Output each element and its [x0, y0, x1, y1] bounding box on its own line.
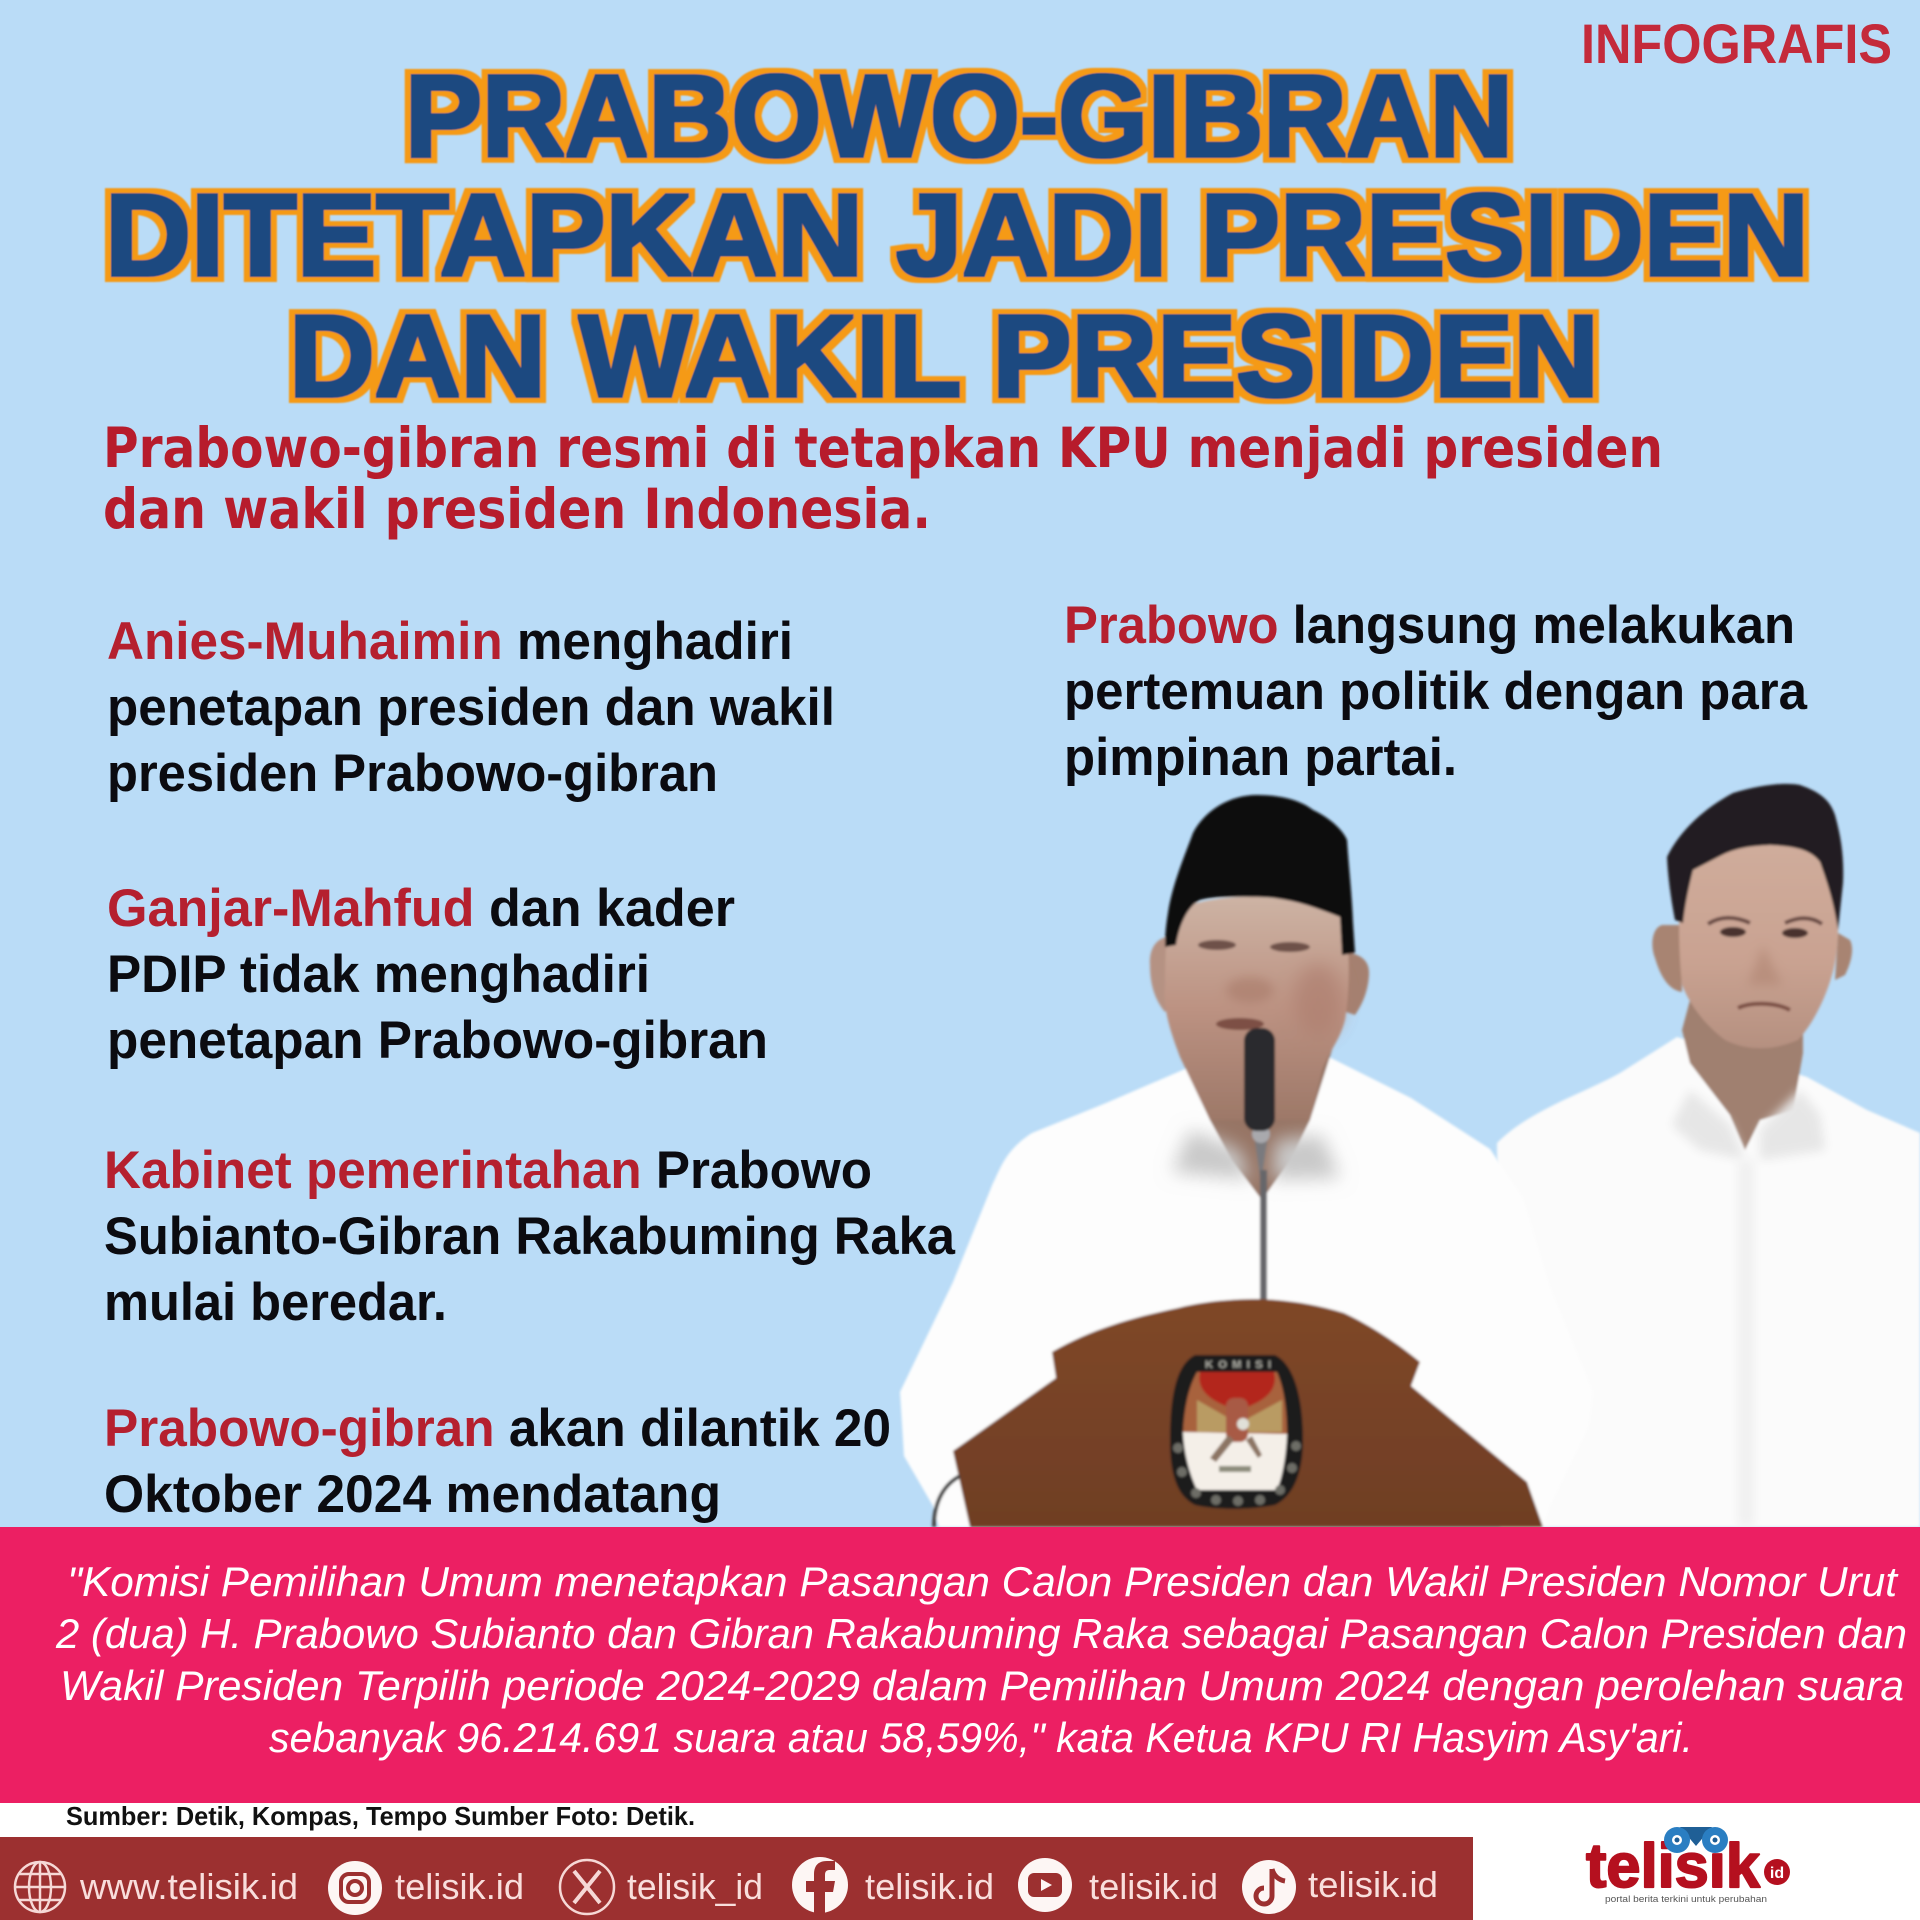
placket: Gibran [1738, 1160, 1754, 1527]
emblem red heart [1199, 1372, 1275, 1410]
text block: Prabowo-gibran dilantik: Oktober 2024 mendatang [104, 1465, 721, 1524]
emblem wings [1197, 1400, 1282, 1432]
icon: youtube [1018, 1858, 1072, 1912]
nose: Gibran [1748, 945, 1782, 985]
quote text: 2 (dua) H. Prabowo Subianto dan Gibran Rakabuming Raka sebagai Pasangan Calon Presiden dan [55, 1610, 1907, 1657]
icon: globe [15, 1862, 65, 1912]
text block: Prabowo-gibran dilantik [104, 1399, 891, 1524]
icon: facebook [792, 1857, 848, 1913]
text block: Prabowo pertemuan politik [1064, 596, 1807, 787]
hair: Gibran [1667, 784, 1843, 930]
logo badge: id [1770, 1865, 1784, 1882]
logo badge [1764, 1859, 1790, 1885]
subtitle: Prabowo-gibran resmi di tetapkan KPU menjadi presiden [103, 416, 1663, 480]
neck: Gibran [1682, 1000, 1803, 1150]
quote text [55, 1558, 1907, 1761]
text block: Ganjar-Mahfud: Ganjar-Mahfud dan kader [107, 879, 735, 938]
text block: Kabinet pemerintahan: Kabinet pemerintahan Prabowo [104, 1141, 872, 1200]
emblem red half [1183, 1372, 1287, 1435]
icon: tiktok [1242, 1860, 1296, 1914]
ears: Prabowo [1150, 937, 1178, 1012]
text block: Prabowo pertemuan politik: pimpinan partai. [1064, 728, 1457, 787]
title [105, 51, 1809, 421]
facebook handle: telisik.id [865, 1866, 994, 1907]
eyes: Prabowo [1198, 940, 1310, 952]
text block: Anies-Muhaimin: penetapan presiden dan wakil [107, 678, 835, 737]
text block: Anies-Muhaimin: Anies-Muhaimin menghadiri [107, 612, 793, 671]
collar: Prabowo [1172, 1130, 1340, 1180]
subtitle [103, 416, 1663, 541]
quote panel [0, 1527, 1920, 1803]
website: www.telisik.id [79, 1866, 298, 1907]
cheek shading: Prabowo [1294, 964, 1342, 1036]
mouth: Prabowo [1216, 1018, 1264, 1030]
logo eyes [1664, 1827, 1728, 1853]
footer background [0, 1837, 1473, 1920]
subtitle: dan wakil presiden Indonesia. [103, 477, 931, 541]
eyes: Gibran [1708, 918, 1822, 938]
background [0, 0, 1920, 1530]
microphone stem [1252, 1125, 1270, 1302]
neck: Prabowo [1180, 1050, 1332, 1200]
icon: instagram [328, 1861, 382, 1915]
mouth: Gibran [1738, 1004, 1790, 1010]
logo tagline: portal berita terkini untuk perubahan [1605, 1894, 1767, 1904]
logo: telisik.id [1586, 1827, 1790, 1904]
quote text: sebanyak 96.214.691 suara atau 58,59%," kata Ketua KPU RI Hasyim Asy'ari. [269, 1714, 1693, 1761]
emblem beads [1173, 1441, 1301, 1506]
text block: Kabinet pemerintahan [104, 1141, 955, 1332]
face: Gibran [1679, 835, 1838, 1048]
photo: Prabowo [900, 795, 1593, 1527]
emblem shield [1170, 1355, 1303, 1509]
text block: Ganjar-Mahfud: penetapan Prabowo-gibran [107, 1011, 768, 1070]
collar: Gibran [1672, 1090, 1825, 1160]
cable [934, 1476, 960, 1527]
title: PRABOWO-GIBRAN [405, 51, 1513, 181]
X handle: telisik_id [627, 1866, 763, 1907]
logo wordmark: telisik [1586, 1832, 1760, 1901]
instagram handle: telisik.id [395, 1866, 524, 1907]
shirt: Prabowo [900, 1058, 1593, 1527]
shirt: Gibran [1497, 1037, 1920, 1527]
text block: Anies-Muhaimin [107, 612, 835, 803]
text block: Anies-Muhaimin: presiden Prabowo-gibran [107, 744, 718, 803]
footer bar [0, 1837, 1473, 1920]
photo: Gibran [1497, 784, 1920, 1527]
emblem white half [1183, 1432, 1287, 1490]
title: DITETAPKAN JADI PRESIDEN [105, 170, 1809, 300]
podium [953, 1299, 1543, 1527]
text block: Ganjar-Mahfud: PDIP tidak menghadiri [107, 945, 650, 1004]
face: Prabowo [1165, 897, 1349, 1120]
quote text: "Komisi Pemilihan Umum menetapkan Pasangan Calon Presiden dan Wakil Presiden Nomor Urut [67, 1558, 1899, 1605]
nose: Prabowo [1226, 977, 1274, 1003]
ears: Gibran [1652, 925, 1682, 992]
emblem: KPU [1170, 1355, 1303, 1509]
text block: Ganjar-Mahfud [107, 879, 768, 1070]
youtube handle: telisik.id [1089, 1866, 1218, 1907]
quote text: Wakil Presiden Terpilih periode 2024-2029 dalam Pemilihan Umum 2024 dengan perolehan suara [60, 1662, 1904, 1709]
quote background [0, 1527, 1920, 1803]
source line: Sumber: Detik, Kompas, Tempo Sumber Foto: Detik. [66, 1801, 695, 1831]
hat: Prabowo [1165, 795, 1355, 955]
emblem garuda [1210, 1398, 1262, 1472]
text block: Prabowo pertemuan politik: Prabowo langsung melakukan [1064, 596, 1795, 655]
text block: Prabowo pertemuan politik: pertemuan politik dengan para [1064, 662, 1807, 721]
emblem lettering: KOMISI [1205, 1359, 1271, 1371]
icon: X [560, 1860, 614, 1914]
tiktok handle: telisik.id [1308, 1864, 1438, 1905]
title: DAN WAKIL PRESIDEN [289, 291, 1599, 421]
label: INFOGRAFIS: INFOGRAFIS [1581, 12, 1892, 75]
text block: Kabinet pemerintahan: Subianto-Gibran Rakabuming Raka [104, 1207, 955, 1266]
text block: Prabowo-gibran dilantik: Prabowo-gibran akan dilantik 20 [104, 1399, 891, 1458]
text block: Kabinet pemerintahan: mulai beredar. [104, 1273, 447, 1332]
microphone head [1244, 1028, 1275, 1131]
